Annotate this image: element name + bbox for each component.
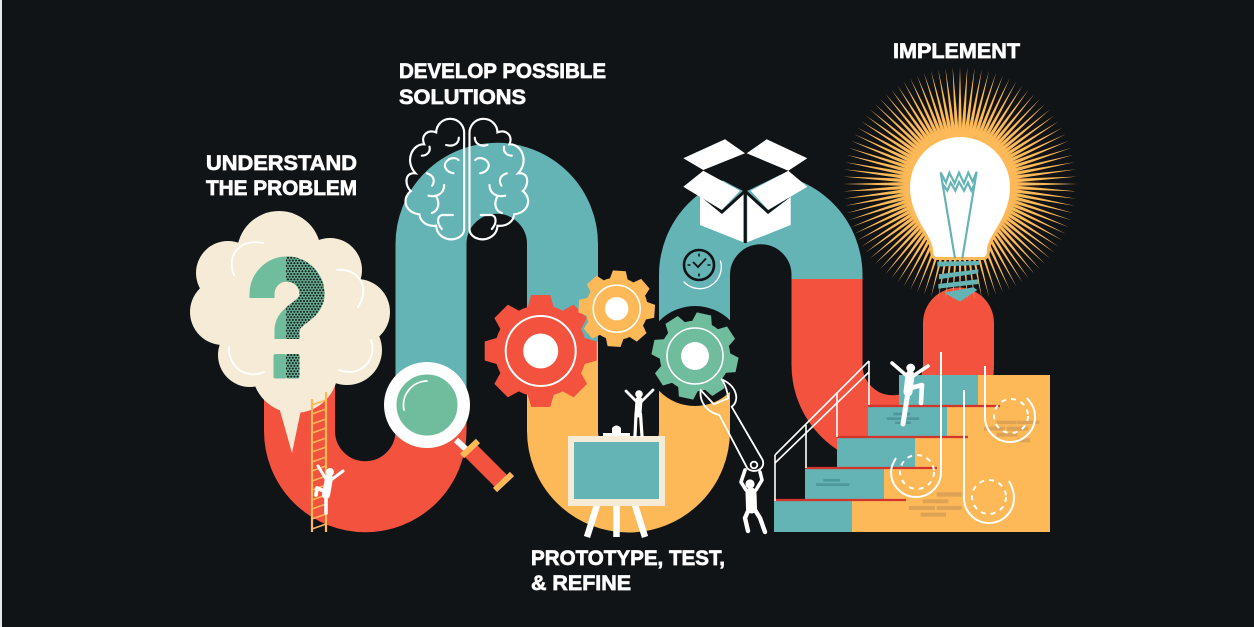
- easel: [568, 426, 665, 537]
- dotted half of curve: [262, 269, 312, 339]
- box flaps: [683, 139, 807, 210]
- heading: develop possible solutions: [399, 60, 606, 109]
- sunburst rays: [839, 63, 1081, 305]
- black circle behind green gear: [645, 306, 745, 406]
- green gear: [644, 305, 746, 407]
- railing: [775, 361, 869, 501]
- pipe: red first bend: [300, 380, 431, 497]
- heading: understand the problem: UNDERSTAND: [206, 152, 357, 175]
- bulb glow: [904, 131, 1016, 243]
- handle collars: [462, 441, 512, 490]
- heading: develop possible solutions: SOLUTIONS: [399, 86, 526, 109]
- screw base: [937, 261, 979, 302]
- dashed circles: [900, 399, 1028, 514]
- heading: understand the problem: [206, 152, 357, 200]
- box seams: [702, 191, 789, 243]
- person holding wrench: [741, 470, 765, 532]
- ladder: [312, 392, 326, 532]
- wrench: [700, 379, 763, 471]
- handle neck: [456, 440, 468, 451]
- hooks and dashed circles: [891, 352, 1035, 523]
- lens: [390, 368, 464, 442]
- board surface: [574, 442, 659, 499]
- filament: [941, 172, 977, 258]
- hook one: [891, 352, 941, 497]
- pipe: teal first arch: [431, 178, 562, 405]
- box interior: [703, 153, 788, 192]
- yellow wall: [852, 375, 1050, 532]
- cardboard box: [683, 139, 807, 243]
- cloud highlights: [229, 242, 373, 374]
- question mark curve: [262, 269, 312, 339]
- question mark: [262, 269, 312, 378]
- heading: understand the problem: THE PROBLEM: [206, 177, 357, 200]
- person on stairs: [892, 363, 928, 424]
- heading: develop possible solutions: DEVELOP POSSIBLE: [399, 60, 606, 83]
- light bulb: [904, 131, 1016, 302]
- yellow gear: [576, 268, 657, 349]
- heading: prototype, test, & refine: PROTOTYPE, TEST,: [531, 547, 725, 570]
- left hemisphere: [406, 119, 464, 239]
- teal steps: [774, 375, 978, 532]
- heading: prototype, test, & refine: [531, 547, 725, 595]
- board frame: [568, 436, 665, 506]
- box body: [700, 193, 743, 242]
- bulb glass: [910, 137, 1010, 257]
- question mark dot: [274, 354, 286, 378]
- pipe: red rounded end: [923, 288, 994, 358]
- yellow wall bricks: [909, 421, 1039, 517]
- red gear: [485, 295, 597, 407]
- right hemisphere: [469, 119, 528, 239]
- red step ledges: [774, 406, 1000, 500]
- teal step bricks: [816, 413, 919, 486]
- handle: [470, 450, 503, 483]
- pipe: teal second arch: [694, 209, 827, 340]
- easel legs: [587, 505, 645, 537]
- heading: prototype, test, & refine: & REFINE: [531, 572, 631, 595]
- hook three: [985, 366, 1035, 442]
- climber on ladder: [316, 466, 343, 513]
- lens highlight: [403, 381, 427, 410]
- pipe: yellow bend: [562, 342, 694, 497]
- heading: implement: IMPLEMENT: [893, 40, 1020, 63]
- person on easel: [626, 390, 653, 436]
- magnifying glass: [390, 368, 512, 490]
- speech cloud: [190, 211, 390, 453]
- staircase block: [774, 375, 1050, 532]
- brain: [406, 119, 528, 239]
- pipe: red final bend: [827, 279, 958, 431]
- clock: [684, 250, 721, 289]
- top clip: [603, 426, 630, 437]
- hook two: [964, 390, 1014, 523]
